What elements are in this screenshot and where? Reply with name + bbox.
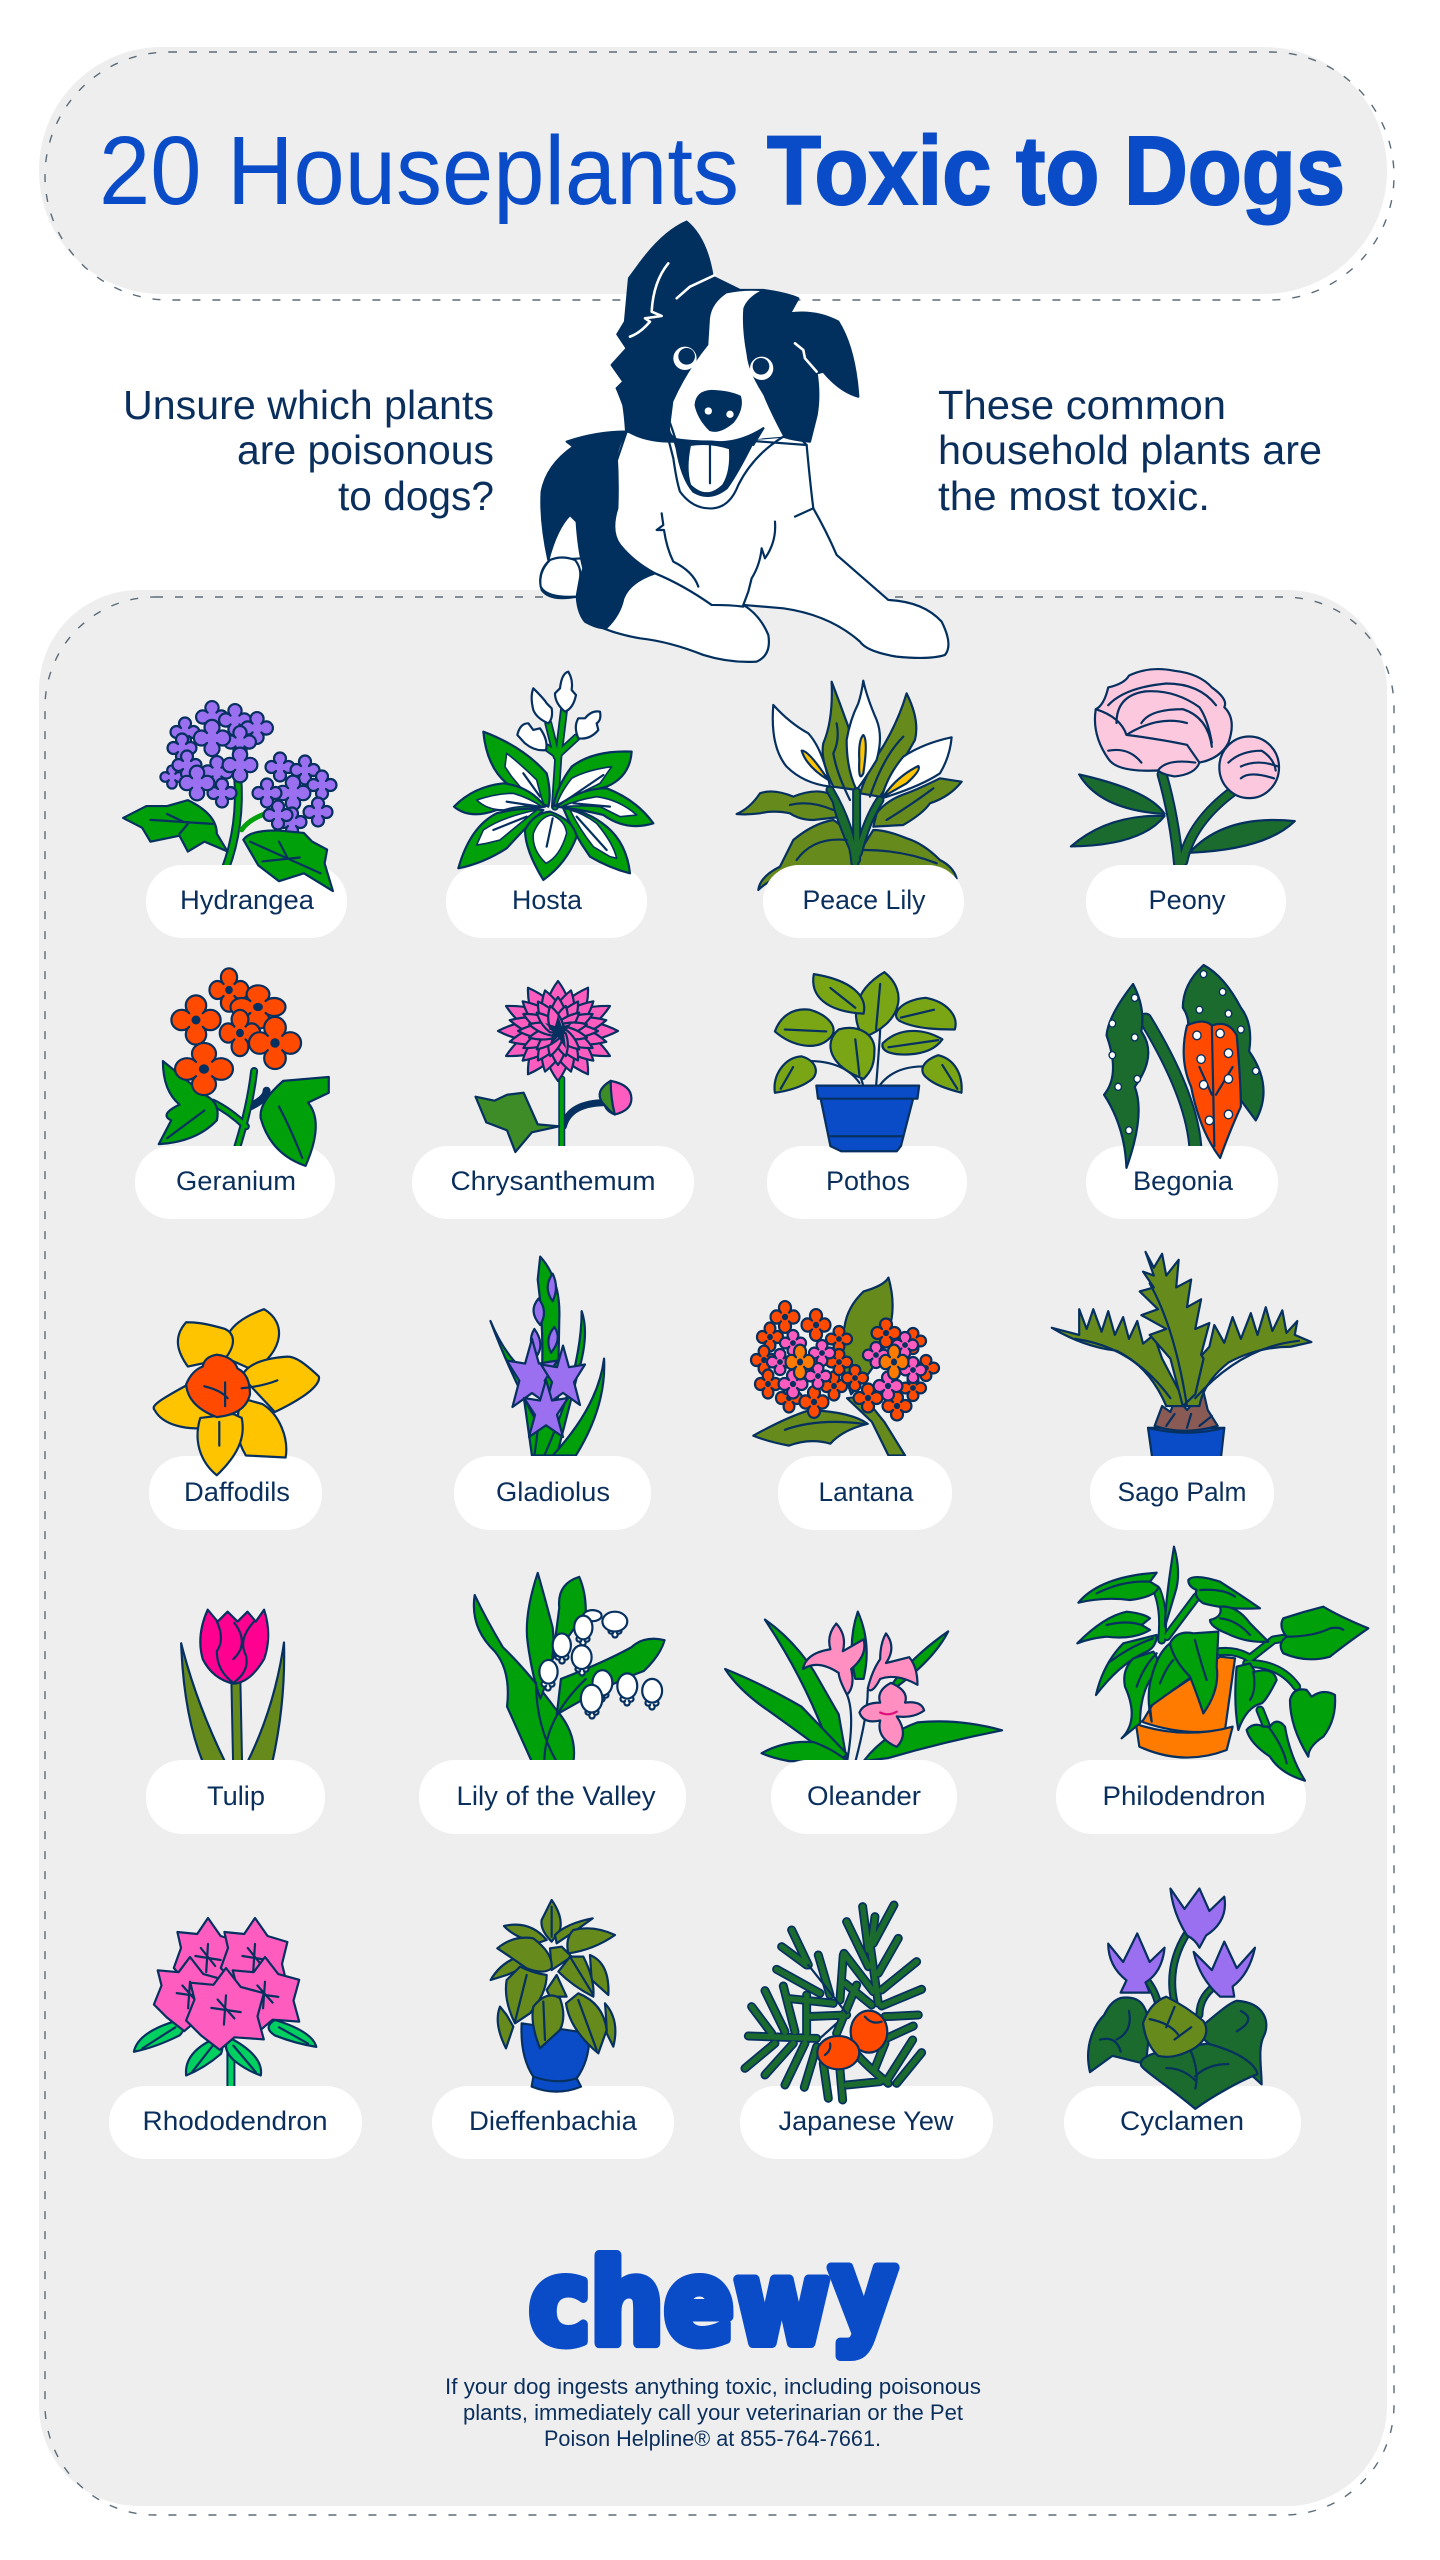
- label: Tulip: [207, 1781, 265, 1811]
- lantana flowers: [751, 1301, 939, 1420]
- label pill: [419, 1760, 686, 1834]
- icon: dog: [540, 222, 948, 662]
- plant: Lily of the Valley: [419, 1573, 686, 1834]
- label: Gladiolus: [496, 1477, 610, 1507]
- plant: Peace Lily: [737, 681, 964, 938]
- label pill: [740, 2086, 993, 2159]
- chrysanthemum bloom: [497, 980, 619, 1082]
- label pill: [771, 1760, 957, 1834]
- label pill: [778, 1456, 952, 1530]
- label pill: [146, 1760, 325, 1834]
- label pill: [767, 1146, 967, 1219]
- logo: chewy: chewy: [529, 2224, 897, 2371]
- geranium leaves: [159, 1061, 329, 1166]
- intro text right: household plants are: [938, 427, 1322, 473]
- label: Peony: [1148, 885, 1226, 915]
- cyclamen: [1088, 1889, 1266, 2109]
- lily foliage: [737, 681, 962, 890]
- intro text left: Unsure which plants: [123, 382, 494, 428]
- label pill: [1086, 1146, 1278, 1219]
- label: Oleander: [807, 1781, 921, 1811]
- title: [99, 116, 1345, 225]
- lily bells: [539, 1610, 662, 1719]
- title: 20 Houseplants: [99, 116, 739, 225]
- label pill: [149, 1456, 322, 1530]
- begonia leaves: [1104, 965, 1264, 1168]
- daffodil flower: [154, 1309, 319, 1475]
- pothos leaves and pot: [775, 972, 962, 1151]
- label: Lantana: [818, 1477, 914, 1507]
- label pill: [763, 865, 964, 938]
- plant: Rhododendron: [109, 1918, 362, 2159]
- plant: Hosta: [446, 672, 653, 938]
- label: Dieffenbachia: [469, 2106, 638, 2136]
- label: Lily of the Valley: [456, 1781, 656, 1811]
- gladiolus leaves: [490, 1257, 604, 1455]
- label pill: [1064, 2086, 1301, 2159]
- label: Peace Lily: [802, 885, 926, 915]
- intro text right: the most toxic.: [938, 473, 1210, 519]
- label: Daffodils: [184, 1477, 290, 1507]
- label pill: [146, 865, 347, 938]
- label: Sago Palm: [1118, 1477, 1246, 1507]
- plant: Daffodils: [149, 1309, 322, 1530]
- peony flower and leaves: [1071, 669, 1295, 865]
- hosta foliage: [454, 672, 653, 880]
- label pill: [1090, 1456, 1274, 1530]
- main panel: [39, 590, 1394, 2515]
- intro text right: [938, 382, 1322, 519]
- plant: Begonia: [1086, 965, 1278, 1219]
- label: Begonia: [1133, 1166, 1234, 1196]
- oleander: [725, 1612, 1002, 1762]
- label: Rhododendron: [142, 2106, 328, 2136]
- plant: Lantana: [751, 1278, 952, 1530]
- intro text left: [123, 382, 494, 519]
- label: Philodendron: [1102, 1781, 1266, 1811]
- geranium stems: [213, 1071, 267, 1146]
- label: Hosta: [512, 885, 583, 915]
- plant: Philodendron: [1056, 1547, 1368, 1834]
- geranium flowers: [171, 968, 301, 1095]
- plant: Cyclamen: [1064, 1889, 1301, 2159]
- yew branches and berries: [745, 1905, 922, 2100]
- label pill: [446, 865, 647, 938]
- label pill: [109, 2086, 362, 2159]
- lantana leaves and stem: [753, 1278, 905, 1455]
- footer text: Poison Helpline® at 855-764-7661.: [544, 2426, 881, 2451]
- rhododendron flowers: [154, 1918, 299, 2050]
- label pill: [1086, 865, 1286, 938]
- header panel: [39, 47, 1394, 300]
- label pill: [454, 1456, 651, 1530]
- philodendron: [1077, 1547, 1368, 1781]
- label pill: [135, 1146, 335, 1219]
- plant: Oleander: [725, 1612, 1002, 1834]
- label: Cyclamen: [1120, 2106, 1244, 2136]
- dieffenbachia: [491, 1900, 615, 2092]
- label: Chrysanthemum: [450, 1166, 656, 1196]
- label: Japanese Yew: [778, 2106, 954, 2136]
- plant: Pothos: [767, 972, 967, 1219]
- chrysanthemum leaf and bud: [476, 1081, 631, 1152]
- chrysanthemum stem: [562, 1079, 607, 1148]
- title: Toxic to Dogs: [767, 116, 1345, 225]
- gladiolus flowers: [507, 1339, 585, 1437]
- plant: Dieffenbachia: [432, 1900, 674, 2159]
- footer text: [445, 2374, 981, 2451]
- lily of the valley: [474, 1573, 665, 1762]
- plant: Peony: [1071, 669, 1295, 938]
- rhododendron stem and leaves: [134, 2020, 316, 2086]
- intro text left: to dogs?: [338, 473, 494, 519]
- leaves: [123, 800, 333, 891]
- intro text right: These common: [938, 382, 1226, 428]
- plant: Gladiolus: [454, 1257, 651, 1530]
- footer text: plants, immediately call your veterinarian or the Pet: [463, 2400, 963, 2425]
- label: Pothos: [826, 1166, 910, 1196]
- plant: Chrysanthemum: [412, 980, 694, 1219]
- label: Hydrangea: [180, 885, 315, 915]
- plant: Tulip: [146, 1610, 325, 1834]
- plant: Geranium: [135, 968, 335, 1219]
- label: Geranium: [176, 1166, 296, 1196]
- stem: [225, 774, 271, 869]
- label pill: [1056, 1760, 1306, 1834]
- plant: Japanese Yew: [740, 1905, 993, 2159]
- sago palm: [1052, 1252, 1311, 1457]
- plant: Sago Palm: [1052, 1252, 1311, 1530]
- flower cluster: [160, 701, 336, 836]
- tulip: [181, 1610, 284, 1762]
- footer text: If your dog ingests anything toxic, including poisonous: [445, 2374, 981, 2399]
- label pill: [432, 2086, 674, 2159]
- begonia stems: [1146, 1020, 1195, 1146]
- intro text left: are poisonous: [237, 427, 494, 473]
- label pill: [412, 1146, 694, 1219]
- plant: Hydrangea: [123, 701, 347, 938]
